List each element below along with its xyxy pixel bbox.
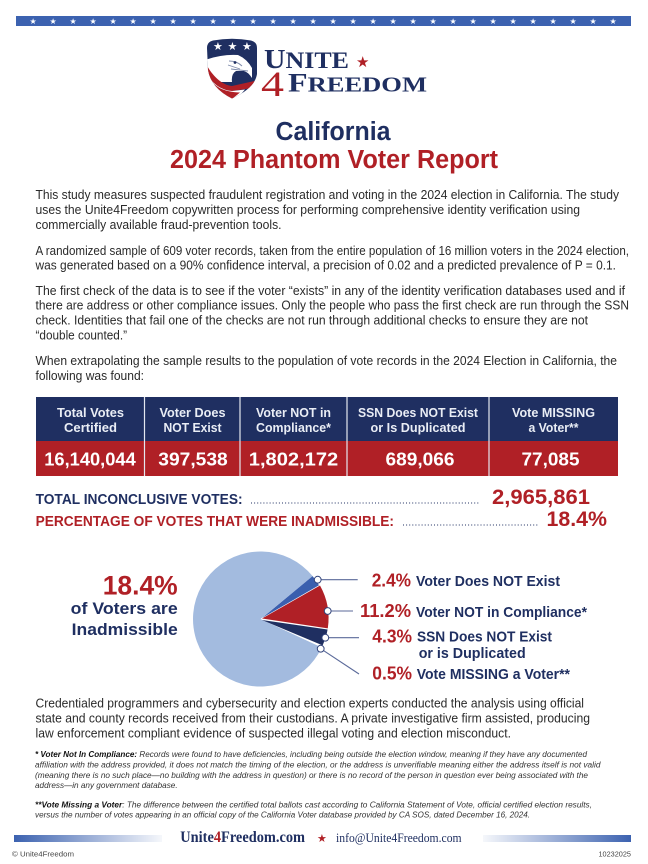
column: ssn does not exist: or Is Duplicated bbox=[370, 420, 466, 435]
footnote: voter not in compliance: (meaning there is no such place—no building with the address in question) or there is no record of the person in question ever being associated with the bbox=[35, 770, 588, 780]
percentage inadmissible line: 18.4% bbox=[546, 508, 607, 531]
pie label: 4.3%: SSN Does NOT Exist bbox=[417, 628, 552, 646]
column: vote missing a voter: 77,085 bbox=[522, 450, 580, 470]
icon: eagle shield: ★★★ bbox=[213, 40, 252, 53]
top star banner: ★★★★★★★★★★★★★★★★★★★★★★★★★★★★★★ bbox=[30, 17, 617, 26]
percentage inadmissible line bbox=[36, 508, 607, 531]
pie slice: admissible votes bbox=[193, 552, 322, 687]
column: voter does not exist: Voter Does bbox=[160, 405, 226, 420]
footnote: vote missing a voter: versus the number of votes appearing in an official copy of the California Voter database provided by CA SOS, dated December 16, 2024. bbox=[35, 810, 530, 820]
pie label: 4.3% bbox=[372, 626, 552, 662]
intro text block: check. Identities that fail one of the checks are not run through additional checks to ensure they are not bbox=[36, 314, 589, 328]
column: total votes certified: 16,140,044 bbox=[44, 450, 136, 470]
intro text block bbox=[35, 188, 629, 383]
footer star: ★ bbox=[317, 832, 327, 845]
pie slice: not in compliance bbox=[262, 586, 329, 628]
column: total votes certified bbox=[44, 405, 136, 470]
logo star: ★ bbox=[356, 53, 369, 71]
column: vote missing a voter: Vote MISSING bbox=[512, 405, 595, 420]
heading: California: California bbox=[276, 118, 391, 146]
logo: Unite 4 Freedom bbox=[207, 38, 426, 98]
pie slice: voter does not exist bbox=[262, 576, 319, 618]
callout: 18.4% of voters inadmissible: 18.4% bbox=[103, 570, 178, 600]
logo wordmark: Unite: UNITE bbox=[264, 44, 349, 74]
callout: 18.4% of voters inadmissible: Inadmissible bbox=[72, 620, 178, 639]
footnote: voter not in compliance: affiliation with the address provided, it does not match the timing of the election, or the address is unverifiable meaning either the address itself is not valid bbox=[35, 760, 601, 770]
heading: report name: 2024 Phantom Voter Report bbox=[170, 146, 498, 174]
intro text block: was generated based on a 90% confidence interval, a precision of 0.02 and a predicted prevalence of P = 0.1. bbox=[35, 258, 616, 272]
methodology text block: law enforcement compliant evidence of suspected illegal voting and election misconduct. bbox=[36, 726, 511, 740]
pie chart bbox=[193, 552, 359, 687]
footer website: Unite4Freedom.com bbox=[180, 829, 305, 846]
pie label: 11.2%: 11.2% bbox=[360, 600, 411, 621]
footnote: voter not in compliance bbox=[35, 749, 601, 790]
column: ssn does not exist bbox=[358, 405, 479, 470]
column: voter not in compliance: 1,802,172 bbox=[249, 450, 338, 470]
column: voter not in compliance bbox=[249, 405, 338, 470]
pie label: 4.3%: 4.3% bbox=[372, 626, 412, 646]
footnote: voter not in compliance: address—in any government database. bbox=[35, 780, 178, 790]
pie label: 4.3%: or is Duplicated bbox=[419, 645, 526, 662]
footnote: vote missing a voter bbox=[35, 800, 592, 820]
pie label: 2.4%: Voter Does NOT Exist bbox=[416, 573, 560, 590]
pie label: 11.2% bbox=[360, 600, 587, 621]
footnote: vote missing a voter: **Vote Missing a Voter: The difference between the certified total ballots cast according to California Statement of Vote, official certified election results, bbox=[35, 800, 592, 810]
pie label: 0.5%: Vote MISSING a Voter** bbox=[417, 666, 570, 683]
column: voter does not exist bbox=[158, 405, 228, 470]
intro text block: When extrapolating the sample results to the population of vote records in the 2024 Election in California, the bbox=[36, 354, 617, 368]
results table bbox=[36, 397, 618, 476]
leader dots bbox=[314, 576, 331, 652]
pie label: 2.4% bbox=[372, 570, 560, 590]
callout: 18.4% of voters inadmissible bbox=[71, 570, 178, 639]
column: ssn does not exist: 689,066 bbox=[386, 450, 454, 470]
callout: 18.4% of voters inadmissible: of Voters are bbox=[71, 599, 178, 618]
percentage inadmissible line: PERCENTAGE OF VOTES THAT WERE INADMISSIBLE: bbox=[36, 514, 394, 530]
logo wordmark: Freedom: FREEDOM bbox=[288, 68, 427, 97]
copyright: © Unite4Freedom bbox=[12, 850, 74, 858]
total inconclusive votes line: 2,965,861 bbox=[492, 486, 590, 509]
pie label: 2.4%: 2.4% bbox=[372, 570, 411, 590]
footer contact bar bbox=[14, 829, 631, 846]
intro text block: uses the Unite4Freedom copywritten process for performing comprehensive identity verification using bbox=[36, 203, 580, 217]
logo wordmark: 4: 4 bbox=[261, 64, 284, 104]
pie label: 0.5%: 0.5% bbox=[372, 662, 412, 684]
column: voter does not exist: NOT Exist bbox=[164, 420, 222, 435]
total inconclusive votes line: TOTAL INCONCLUSIVE VOTES: bbox=[36, 492, 243, 508]
leader lines bbox=[318, 580, 359, 674]
column: vote missing a voter bbox=[512, 405, 595, 470]
footer email: info@Unite4Freedom.com bbox=[336, 831, 462, 845]
footnote: voter not in compliance: * Voter Not In Compliance: Records were found to have deficiencies, including being outside the election window, meaning if they have any documented bbox=[35, 749, 587, 759]
methodology text block: state and county records received from their custodians. A private investigative firm assisted, producing bbox=[36, 712, 590, 726]
pie label: 11.2%: Voter NOT in Compliance* bbox=[416, 604, 587, 621]
column: voter not in compliance: Compliance* bbox=[256, 420, 332, 435]
column: total votes certified: Certified bbox=[64, 420, 117, 435]
column: ssn does not exist: SSN Does NOT Exist bbox=[358, 405, 479, 420]
icon: eagle shield bbox=[207, 38, 257, 98]
intro text block: there are address or other compliance issues. Only the people who pass the first check are run through the SSN bbox=[36, 298, 629, 312]
column: vote missing a voter: a Voter** bbox=[528, 420, 579, 435]
intro text block: The first check of the data is to see if the voter “exists” in any of the identity verification databases used and if bbox=[36, 284, 626, 298]
intro text block: following was found: bbox=[36, 369, 144, 383]
methodology text block bbox=[36, 696, 590, 740]
column: total votes certified: Total Votes bbox=[57, 405, 124, 420]
column: voter not in compliance: Voter NOT in bbox=[256, 405, 331, 420]
methodology text block: Credentialed programmers and cybersecurity and election experts conducted the analysis using official bbox=[36, 696, 584, 710]
intro text block: This study measures suspected fraudulent registration and voting in the 2024 election in California. The study bbox=[36, 188, 620, 202]
total inconclusive votes line bbox=[36, 486, 590, 509]
pie label: 0.5% bbox=[372, 662, 570, 684]
title bbox=[170, 118, 498, 174]
column: voter does not exist: 397,538 bbox=[158, 450, 228, 470]
intro text block: commercially available fraud-prevention tools. bbox=[36, 218, 282, 232]
intro text block: “double counted.” bbox=[36, 328, 127, 342]
document code: 10232025 bbox=[598, 850, 631, 858]
pie slice: ssn bbox=[262, 620, 328, 645]
